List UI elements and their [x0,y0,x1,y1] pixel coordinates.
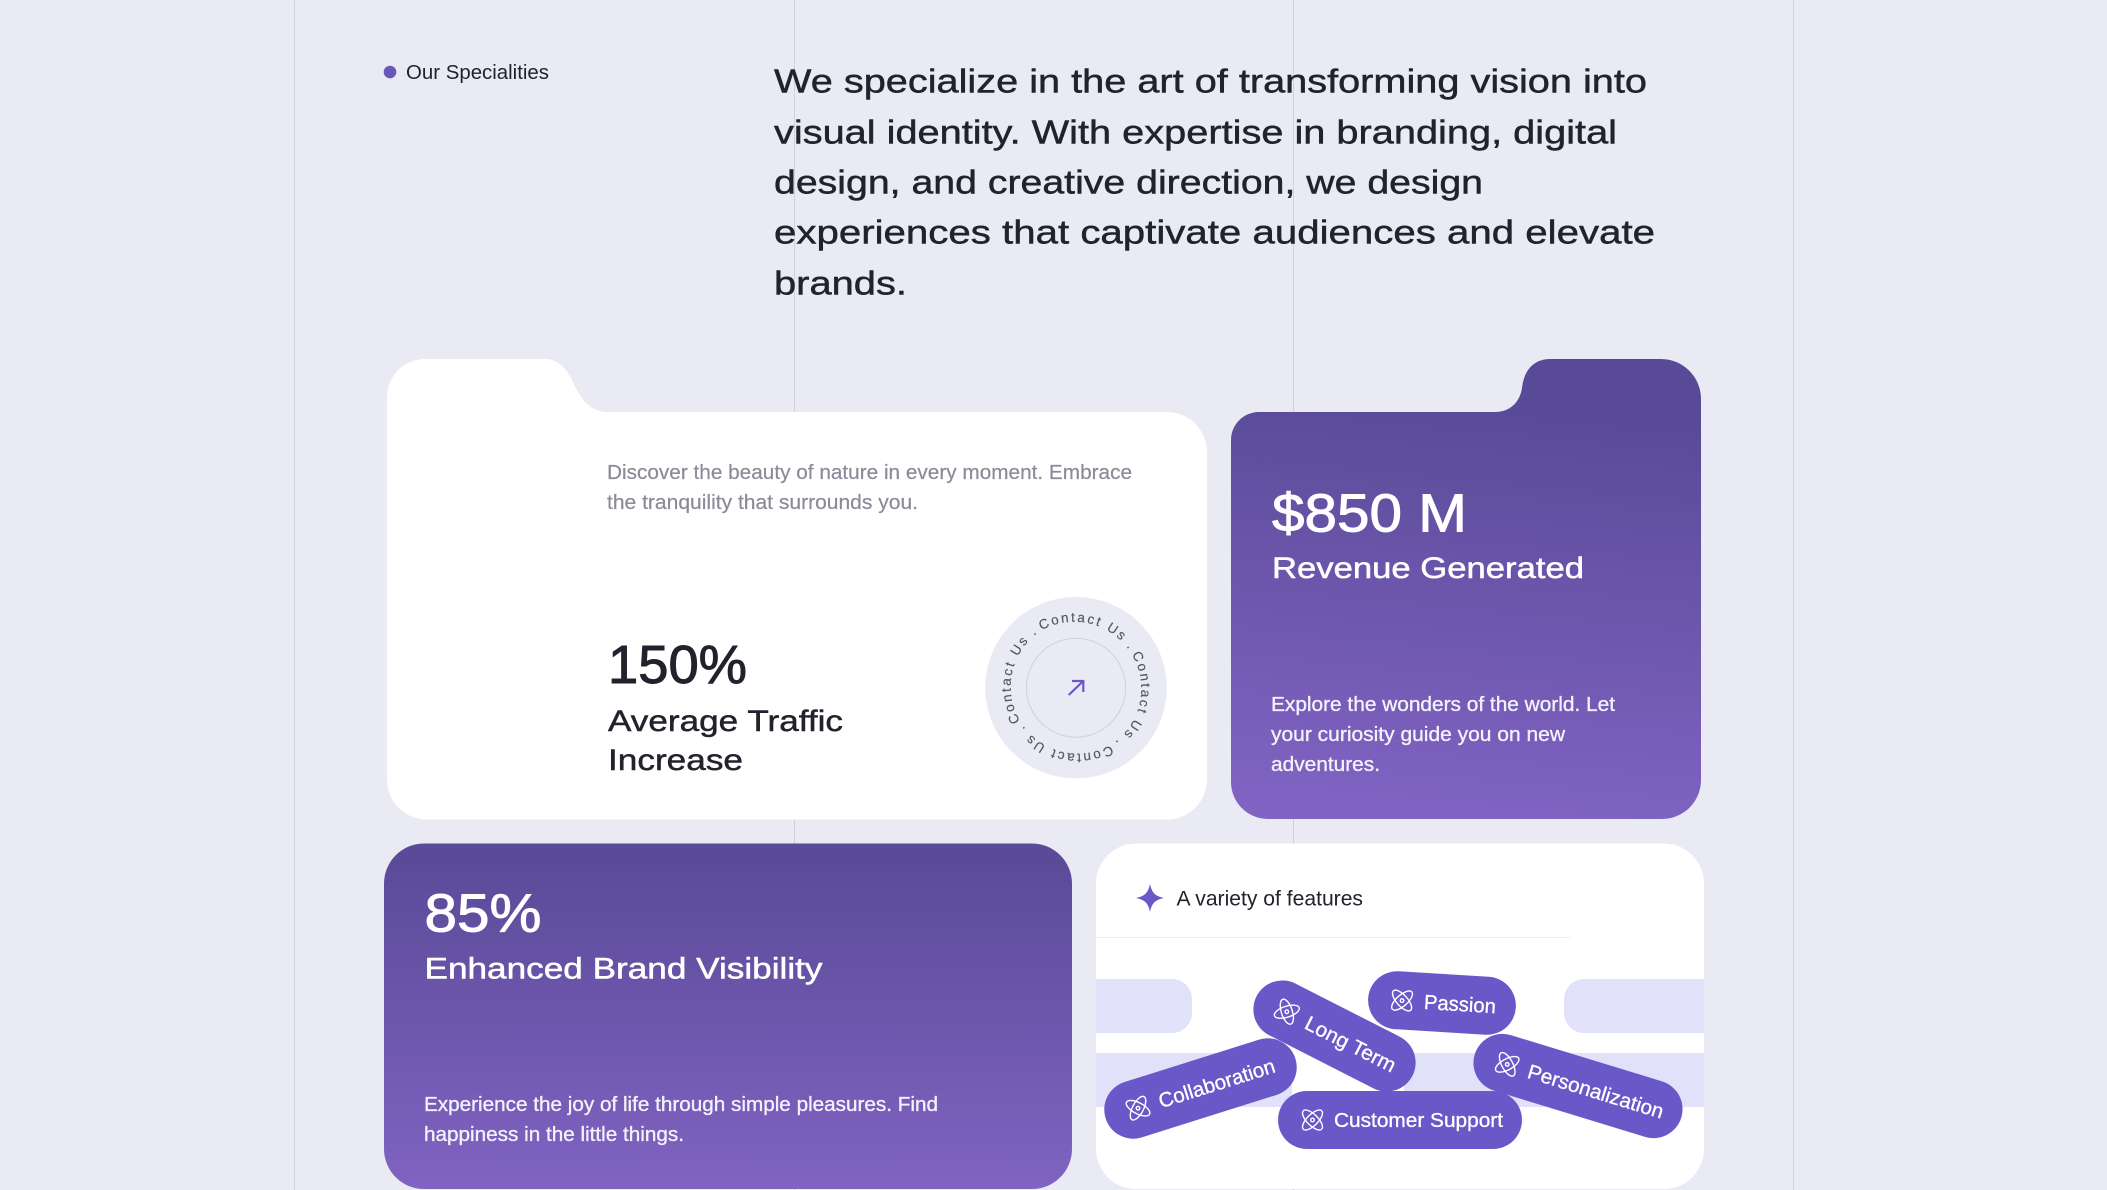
description text [607,461,1132,514]
stat label: Average Traffic [608,705,843,738]
pill: Customer Support [1278,1091,1522,1149]
description text: adventures. [1271,753,1380,776]
badge: contact us [985,597,1167,778]
pill: Collaboration [1097,1031,1304,1146]
badge: contact us: Contact Us . [1116,652,1150,742]
pill: Passion: Passion [1423,991,1497,1018]
stat: 85%: 85% [424,884,542,944]
description text: the tranquility that surrounds you. [607,491,918,514]
description text: happiness in the little things. [424,1123,684,1146]
stat label: Enhanced Brand Visibility [424,952,823,986]
pill: Personalization [1466,1027,1690,1145]
panel: a variety of features [1096,844,1704,1189]
description text [1271,693,1615,776]
description text: your curiosity guide you on new [1271,723,1565,746]
intro paragraph: experiences that captivate audiences and elevate [774,214,1655,250]
pill: Long Term: Long Term [1301,1012,1400,1077]
description text: Explore the wonders of the world. Let [1271,693,1615,716]
label text: Our Specialities [406,61,549,84]
card background [1231,359,1701,819]
panel: revenue generated [1231,359,1701,819]
panel: average traffic increase [387,359,1207,820]
card background [384,844,1072,1189]
description text [424,1093,938,1146]
section label: Our Specialities [384,61,549,84]
stat: $850 M: $850 M [1272,484,1467,544]
pill: Personalization: Personalization [1525,1060,1666,1123]
pill: Customer Support: Customer Support [1334,1109,1503,1132]
panel: enhanced brand visibility [384,844,1072,1189]
pill: Long Term [1243,970,1426,1102]
intro paragraph [774,62,1655,302]
icon: sparkle [1136,884,1164,912]
stat label: Revenue Generated [1272,552,1584,585]
stat label [608,705,843,777]
lavender background bands [1096,979,1704,1107]
description text: Experience the joy of life through simple pleasures. Find [424,1093,938,1116]
stat label: Increase [608,744,743,777]
badge: contact us: Contact Us . [1002,633,1036,724]
intro paragraph: visual identity. With expertise in branding, digital [774,114,1617,150]
stat: 150%: 150% [608,635,747,695]
pill: Passion [1366,970,1518,1036]
pill: Collaboration: Collaboration [1156,1055,1278,1113]
intro paragraph: design, and creative direction, we design [774,164,1483,200]
intro paragraph: brands. [774,264,907,302]
badge: contact us: Contact Us . [1039,613,1130,649]
icon: arrow [1069,681,1083,695]
description text: Discover the beauty of nature in every moment. Embrace [607,461,1132,484]
badge: contact us: Contact Us . [1022,726,1113,762]
icon: purple dot [384,66,396,78]
card background [387,359,1207,820]
card background [1096,844,1704,1189]
panel heading: A variety of features [1176,888,1363,910]
intro paragraph: We specialize in the art of transforming vision into [774,62,1647,100]
